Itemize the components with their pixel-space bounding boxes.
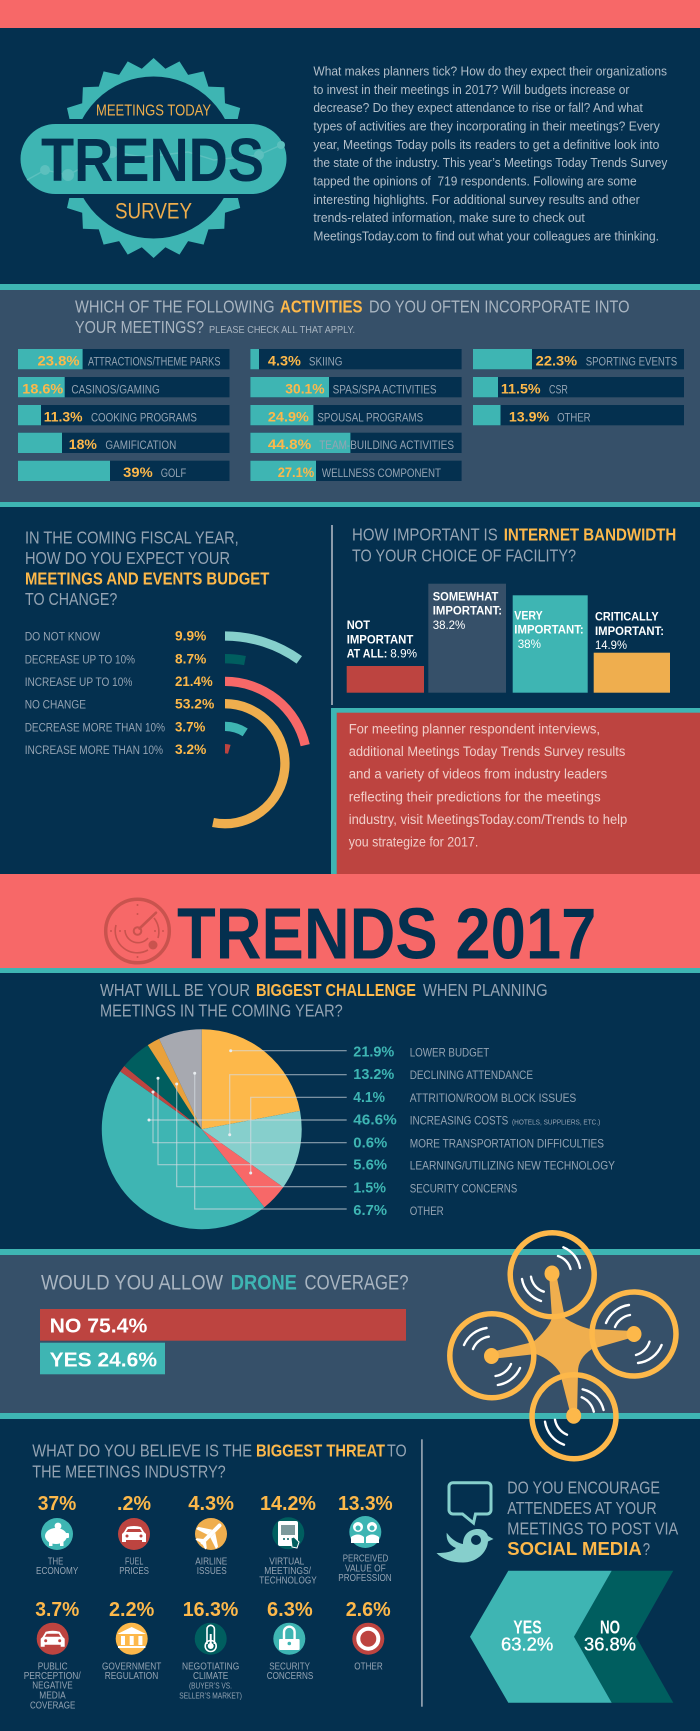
pie legend: 0.6% [353,1134,387,1151]
heading: activities: YOUR MEETINGS? [75,317,204,337]
threat: airline issues [188,1493,234,1577]
heading: internet bandwidth: INTERNET BANDWIDTH [504,525,676,545]
threat: the economy: 37% [38,1493,77,1515]
bars: column two: SKIING [309,356,342,368]
threat: the economy: THE [48,1555,63,1567]
bars: column three: 13.9% [509,408,550,424]
bars: column one: ATTRACTIONS/THEME PARKS [88,356,221,368]
threat: public perception: PERCEPTION/ [24,1670,81,1682]
threat: virtual meetings: MEETINGS/ [264,1565,311,1577]
bars: column three: 11.5% [501,380,541,396]
heading: budget: IN THE COMING FISCAL YEAR, [25,527,239,547]
heading: biggest challenge: MEETINGS IN THE COMING YEAR? [100,1001,343,1021]
intro paragraph: interesting highlights. For additional survey results and other [313,192,640,207]
icon: thermometer [195,1623,227,1655]
pie chart: biggest challenge [102,1029,347,1229]
budget legend list: 3.7% [175,718,206,734]
pie legend: 6.7% [353,1202,387,1219]
bar: no: NO 75.4% [50,1314,147,1337]
threat: fuel prices: .2% [117,1493,151,1515]
threat: perceived value: 13.3% [338,1493,393,1515]
threat: the economy [36,1493,78,1577]
threat: fuel prices: FUEL [125,1555,143,1567]
bars: column two: 30.1% [285,380,325,396]
bars: column two: 4.3% [268,352,301,368]
intro paragraph: to invest in their meetings in 2017? Will budgets increase or [313,82,630,97]
leader lines [148,1049,347,1209]
bars: column one: CASINOS/GAMING [71,384,160,396]
budget legend list: DO NOT KNOW [25,632,100,644]
pie legend: LEARNING/UTILIZING NEW TECHNOLOGY [410,1159,615,1173]
callout: trends link: reflecting their predictions for the meetings [349,789,601,804]
bars: column two: SPAS/SPA ACTIVITIES [333,384,437,396]
chevron: yes: 63.2% [501,1634,553,1655]
budget legend list: 8.7% [175,650,207,666]
bars: column three: OTHER [557,412,591,424]
heading: social media [507,1477,679,1559]
icon: airplane [190,1514,231,1555]
threat: public perception: MEDIA [39,1689,66,1701]
bars: column two: SPOUSAL PROGRAMS [317,412,423,424]
bar: not important: 8.9% [390,647,417,661]
bar: very important: VERY [514,608,543,622]
heading: social media: SOCIAL MEDIA [507,1538,642,1559]
budget legend list: 3.2% [175,741,207,757]
bar: critically important: 14.9% [595,638,627,652]
icon: people [349,1516,381,1548]
pie legend: MORE TRANSPORTATION DIFFICULTIES [410,1136,604,1150]
bars: column two: WELLNESS COMPONENT [322,468,441,480]
pie legend: 21.9% [353,1044,394,1061]
threat: the economy: ECONOMY [36,1565,78,1577]
threat: public perception: COVERAGE [30,1699,75,1711]
bars: column one: 18% [69,436,97,452]
bars: column three: 22.3% [536,352,578,368]
heading: biggest challenge: BIGGEST CHALLENGE [256,980,416,1000]
top coral band [0,0,700,28]
threat: virtual meetings: TECHNOLOGY [259,1575,317,1587]
intro paragraph: decrease? Do they expect attendance to rise or fall? And what [313,100,643,115]
bar: very important [513,595,588,693]
heading: biggest threat: THE MEETINGS INDUSTRY? [32,1461,226,1481]
threat: other: 2.6% [346,1599,391,1621]
divider [421,1439,423,1707]
heading: budget: TO CHANGE? [25,589,118,609]
divider [331,525,333,705]
icon: speech bubble [449,1483,491,1523]
pie legend: LOWER BUDGET [410,1046,490,1060]
callout: trends link: and a variety of videos from industry leaders [349,767,608,782]
bar: somewhat important: 38.2% [433,618,466,632]
bars: column two: TEAM-BUILDING ACTIVITIES [319,440,454,452]
bar: yes: YES 24.6% [50,1349,157,1372]
heading: internet bandwidth: TO YOUR CHOICE OF FACILITY? [352,545,576,565]
intro paragraph: types of activities are they incorporating in their meetings? Every [313,118,660,134]
icon: drone [450,1233,676,1459]
threat: public perception: PUBLIC [38,1660,68,1672]
threat: negotiating climate: NEGOTIATING [182,1660,239,1672]
intro paragraph: year, Meetings Today polls its readers to get a definitive look into [313,137,659,152]
budget legend list: 9.9% [175,628,207,644]
heading: drone: DRONE [231,1272,297,1295]
intro paragraph [313,64,668,244]
icon: piggy bank [41,1518,73,1550]
callout: trends link: industry, visit MeetingsToday.com/Trends to help [349,812,627,827]
threat: fuel prices [117,1493,151,1577]
bar: somewhat important: IMPORTANT: [433,604,502,618]
threat: government regulation: REGULATION [105,1670,158,1682]
icon: lock [273,1623,305,1655]
icon: car [37,1623,69,1655]
bars: column three: SPORTING EVENTS [586,356,677,368]
logo: trends survey badge: TRENDS [41,126,264,194]
chevron: no [574,1571,673,1703]
threat: negotiating climate: CLIMATE [193,1670,228,1682]
threat: security concerns: CONCERNS [267,1670,313,1682]
threat: government regulation [102,1599,162,1682]
heading: budget: MEETINGS AND EVENTS BUDGET [25,568,270,588]
pie legend: 1.5% [353,1179,386,1196]
chevron chart: social media [470,1571,673,1703]
heading: activities [75,296,630,337]
heading: biggest challenge: WHAT WILL BE YOUR [100,980,250,1000]
bars: column three [473,349,684,425]
bars: column two: 27.1% [278,464,315,480]
threat: government regulation: GOVERNMENT [102,1660,162,1672]
band: trends 2017 [0,874,700,974]
title: trends 2017: TRENDS 2017 [177,893,596,974]
icon: bank [116,1623,148,1655]
bars: column two [250,349,462,481]
heading: social media: ATTENDEES AT YOUR [507,1498,657,1518]
panel: activities [0,284,700,507]
pie legend: 46.6% [353,1111,397,1128]
threat: airline issues: 4.3% [188,1493,234,1515]
bars: column two: 24.9% [268,408,309,424]
intro paragraph: the state of the industry. This year’s Meetings Today Trends Survey [313,155,668,170]
pie legend [353,1044,615,1219]
pie legend: INCREASING COSTS [410,1113,508,1127]
threat: negotiating climate: (BUYER’S VS. [189,1680,232,1690]
threat: virtual meetings: 14.2% [260,1493,316,1515]
heading: internet bandwidth [352,525,676,565]
threat: other: OTHER [354,1660,383,1672]
logo: trends survey badge [20,58,286,258]
budget legend list: DECREASE UP TO 10% [25,654,135,666]
chevron: no: 36.8% [584,1634,636,1655]
bars: column one: 11.3% [44,408,83,424]
bar: yes [40,1343,165,1374]
threat: security concerns: 6.3% [267,1599,313,1621]
heading: drone [41,1272,408,1295]
threat: security concerns: SECURITY [269,1660,310,1672]
bars: column one: GAMIFICATION [105,440,176,452]
bar: very important: 38% [518,637,541,651]
budget legend list [25,628,215,757]
threat: negotiating climate: 16.3% [183,1599,239,1621]
heading: biggest threat: WHAT DO YOU BELIEVE IS THE [32,1441,252,1461]
intro paragraph: trends-related information, make sure to check out [313,210,585,225]
bars: column one: 23.8% [38,352,80,368]
heading: activities: ACTIVITIES [280,296,362,316]
bar: no [40,1309,406,1341]
logo: trends survey badge: MEETINGS TODAY [96,102,211,120]
icon: bird [436,1529,494,1562]
chevron: yes [470,1571,612,1703]
bar: very important: IMPORTANT: [514,623,584,637]
intro paragraph: tapped the opinions of 719 respondents. Following are some [313,174,637,188]
logo: trends survey badge: SURVEY [115,198,192,223]
radial arc chart: budget [213,636,305,824]
callout: trends link [331,708,700,875]
threat: security concerns [267,1599,313,1682]
heading: activities: DO YOU OFTEN INCORPORATE INTO [369,296,630,316]
threat: government regulation: 2.2% [109,1599,155,1621]
threat: perceived value: PERCEIVED [343,1553,389,1565]
bars: column one: GOLF [161,468,186,480]
bar: critically important [594,610,670,693]
heading: social media: ? [643,1539,650,1559]
threat: airline issues: AIRLINE [195,1555,227,1567]
icon: tablet [272,1517,304,1549]
heading: internet bandwidth: HOW IMPORTANT IS [352,525,498,545]
threat: public perception: NEGATIVE [32,1680,73,1692]
chevron: no: NO [600,1616,620,1637]
heading: social media: DO YOU ENCOURAGE [507,1477,660,1497]
bar: not important: IMPORTANT [347,632,414,646]
heading: budget: HOW DO YOU EXPECT YOUR [25,548,230,568]
pie legend: OTHER [410,1204,444,1218]
pie legend: 5.6% [353,1157,387,1174]
bars: column one: COOKING PROGRAMS [91,412,197,424]
threat: perceived value: VALUE OF [345,1562,386,1574]
icon: radar [106,899,169,963]
bar: not important: NOT [347,618,371,632]
heading: drone: COVERAGE? [304,1272,408,1295]
budget legend list: NO CHANGE [25,700,86,712]
icon: car [118,1518,150,1550]
bar: critically important: IMPORTANT: [595,624,664,638]
budget legend list: DECREASE MORE THAN 10% [25,722,165,734]
threat: negotiating climate [179,1599,242,1700]
heading: biggest threat: TO [387,1441,407,1461]
intro paragraph: What makes planners tick? How do they expect their organizations [313,64,667,78]
threat: airline issues: ISSUES [197,1565,227,1577]
budget legend list: INCREASE UP TO 10% [25,677,132,689]
threat: perceived value: PROFESSION [338,1572,392,1584]
panel: drone coverage [0,1249,700,1419]
threat: public perception: 3.7% [35,1599,80,1621]
pie legend: ATTRITION/ROOM BLOCK ISSUES [410,1091,576,1105]
budget legend list: INCREASE MORE THAN 10% [25,745,163,757]
callout: trends link: you strategize for 2017. [349,835,478,850]
heading: biggest threat: BIGGEST THREAT [256,1441,385,1461]
bars: column one: 18.6% [22,380,64,396]
pie legend: (HOTELS, SUPPLIERS, ETC.) [512,1117,601,1126]
bar: somewhat important: SOMEWHAT [433,589,499,603]
chevron: yes: YES [513,1616,542,1637]
heading: activities: WHICH OF THE FOLLOWING [75,296,274,316]
pie legend: DECLINING ATTENDANCE [410,1068,533,1082]
bar: not important: AT ALL: [347,647,387,661]
intro paragraph: MeetingsToday.com to find out what your colleagues are thinking. [313,228,659,244]
bars: column two: 44.8% [268,436,312,452]
callout: trends link: additional Meetings Today Trends Survey results [349,744,626,759]
bar: somewhat important [428,584,506,693]
icon: gear [352,1623,384,1655]
heading: biggest challenge [100,980,548,1021]
bars: column one [18,349,230,481]
callout: trends link: For meeting planner respondent interviews, [349,721,600,736]
heading: biggest threat [32,1441,407,1481]
bar chart: bandwidth importance [347,584,670,693]
budget legend list: 53.2% [175,696,215,712]
bars: column three: CSR [549,384,568,396]
pie legend: 13.2% [353,1066,394,1083]
heading: biggest challenge: WHEN PLANNING [423,980,548,1000]
threat: virtual meetings [259,1493,317,1587]
threat: perceived value [338,1493,393,1584]
pie legend: SECURITY CONCERNS [410,1181,517,1195]
threat: virtual meetings: VIRTUAL [269,1555,304,1567]
budget legend list: 21.4% [175,673,213,689]
threat: fuel prices: PRICES [119,1565,149,1577]
threat: public perception [24,1599,81,1711]
bar: not important [347,618,424,693]
threat: other [346,1599,391,1672]
pie legend: 4.1% [353,1089,385,1106]
heading: budget [25,527,270,609]
threat: negotiating climate: SELLER’S MARKET) [179,1690,242,1700]
heading: drone: WOULD YOU ALLOW [41,1272,223,1295]
heading: activities: PLEASE CHECK ALL THAT APPLY. [209,324,355,336]
bars: column one: 39% [123,464,153,480]
bar: critically important: CRITICALLY [595,610,659,624]
